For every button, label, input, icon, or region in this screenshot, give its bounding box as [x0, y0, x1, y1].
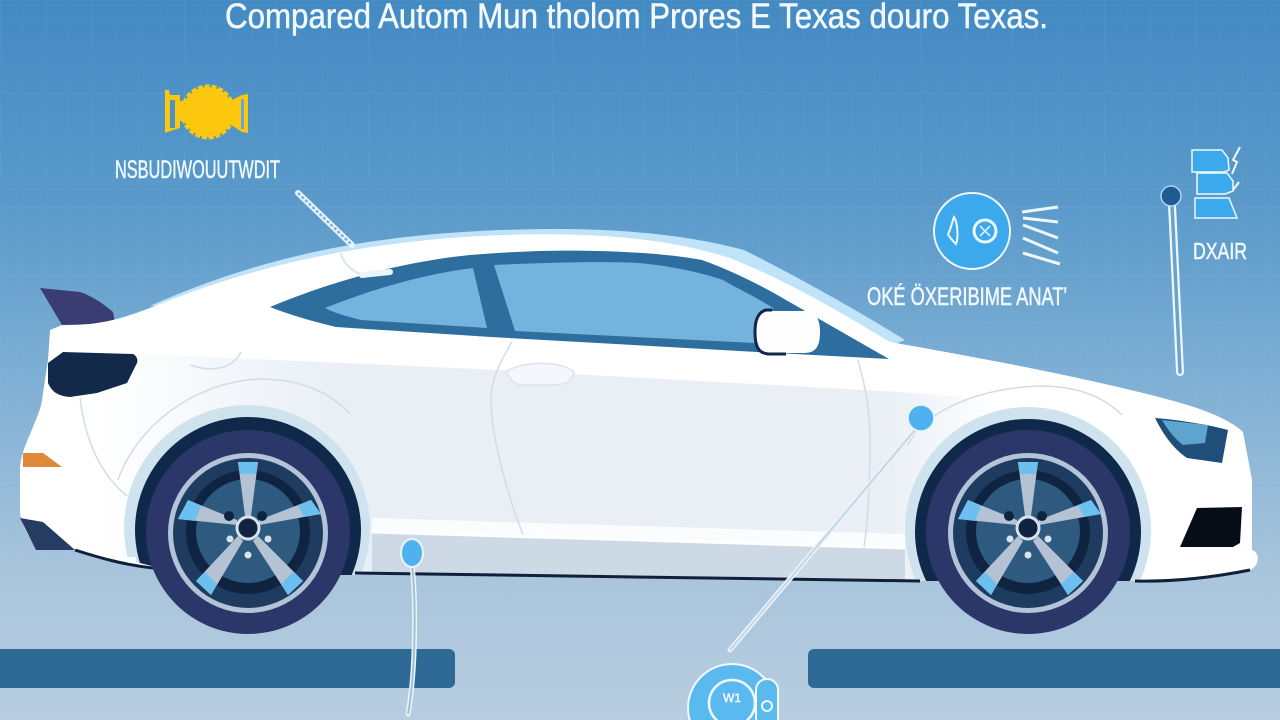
door handle — [506, 363, 574, 385]
pin: right lever — [1161, 186, 1181, 372]
rear window — [325, 268, 487, 328]
callout: front dot — [730, 405, 934, 650]
door lines — [80, 342, 1122, 547]
icon: bottom gauge — [688, 664, 778, 720]
icon: engine — [165, 86, 248, 138]
icon: bottom gauge: W1 — [723, 691, 741, 705]
car — [20, 229, 1258, 653]
icon: fan circle — [934, 193, 1060, 269]
body panels — [189, 356, 958, 580]
indicator — [23, 453, 62, 467]
under line — [75, 550, 1250, 581]
callout: rear needle — [298, 193, 390, 275]
icon: stacked parts — [1192, 147, 1240, 218]
arch: front — [905, 407, 1151, 581]
front window — [494, 262, 773, 343]
roof highlight — [150, 229, 905, 350]
tail light — [48, 352, 137, 397]
mirror — [755, 311, 820, 353]
label: right lever: DXAIR — [1193, 238, 1247, 264]
label: engine: NSBUDIWOUUTWDIT — [115, 156, 280, 184]
callout: bottom left dot — [401, 539, 423, 714]
arch: rear — [124, 405, 370, 575]
label: fan circle: OKÉ ÖXERIBIME ANAT' — [867, 282, 1067, 311]
lower rear bumper — [20, 518, 75, 550]
bar: left base — [0, 649, 455, 688]
car body — [20, 234, 1258, 581]
wheel: rear — [146, 430, 350, 634]
bar: right base — [808, 649, 1280, 688]
grille — [1180, 507, 1242, 547]
spoiler — [40, 288, 115, 325]
wheel: front — [926, 430, 1130, 634]
windows frame — [270, 251, 889, 359]
headlight — [1155, 418, 1228, 463]
